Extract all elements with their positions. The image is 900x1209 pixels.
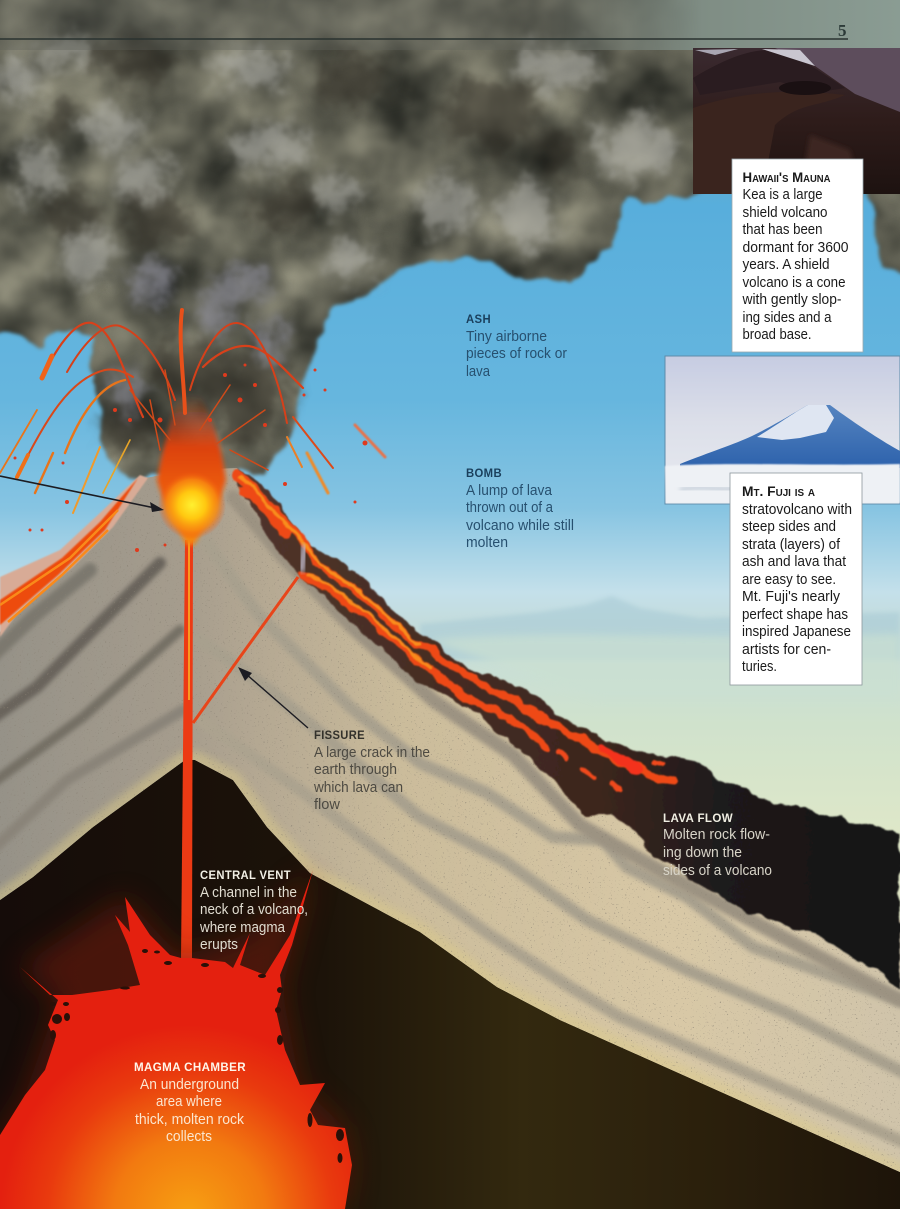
label: magma chamber — [134, 1060, 246, 1145]
caption box: Mt. Fuji: perfect shape has — [742, 607, 848, 623]
label: fissure: flow — [314, 797, 341, 813]
caption box: Mauna Kea: Kea is a large — [742, 187, 822, 203]
caption box: Mauna Kea: years. A shield — [742, 257, 830, 273]
leader arrow: fissure — [238, 667, 308, 728]
caption box: Mt. Fuji: turies. — [742, 659, 777, 675]
label: fissure: earth through — [314, 762, 397, 778]
caption box: Mt. Fuji: inspired Japanese — [742, 624, 851, 640]
label: lava flow: Molten rock flow- — [663, 827, 770, 843]
label: central vent: where magma — [199, 920, 286, 936]
caption box: Mt. Fuji: strata (layers) of — [742, 537, 841, 553]
label: bomb — [466, 466, 574, 551]
volcano cone body — [0, 468, 900, 1180]
caption box: Mt. Fuji: Mt. Fuji's nearly — [742, 589, 841, 605]
lava spatter dots — [14, 364, 368, 552]
label: magma chamber: An underground — [140, 1077, 239, 1093]
label: ash: ASH — [466, 312, 491, 326]
caption box: Mauna Kea: volcano is a cone — [742, 275, 846, 291]
page number: 5 — [838, 21, 846, 40]
caption box: Mauna Kea: that has been — [742, 222, 822, 238]
label: lava flow: sides of a volcano — [663, 863, 772, 879]
label: central vent: CENTRAL VENT — [200, 868, 291, 882]
label: lava flow: ing down the — [663, 845, 742, 861]
label: fissure: A large crack in the — [314, 745, 430, 761]
label: central vent: neck of a volcano, — [200, 902, 308, 918]
label: magma chamber: MAGMA CHAMBER — [134, 1060, 246, 1074]
caption box: Mt. Fuji: are easy to see. — [742, 572, 836, 588]
caption box: Mt. Fuji: artists for cen- — [742, 642, 831, 658]
caption box: Mauna Kea — [732, 159, 863, 352]
caption box: Mauna Kea: with gently slop- — [742, 292, 842, 308]
caption box: Mauna Kea: ing sides and a — [742, 310, 832, 326]
distant landscape: mountain and haze — [420, 596, 900, 700]
label: ash: pieces of rock or — [466, 346, 567, 362]
label: fissure: which lava can — [313, 780, 403, 796]
lava fountain arcs — [0, 310, 385, 513]
label: bomb: BOMB — [466, 466, 502, 480]
magma lattice holes — [50, 949, 344, 1163]
photo: Mauna Kea — [693, 48, 900, 194]
photo: Mt. Fuji — [665, 356, 900, 504]
label: bomb: A lump of lava — [466, 483, 553, 499]
magma glow in rock — [0, 870, 352, 1209]
caption box: Mauna Kea: Hawaii's Mauna — [742, 169, 830, 185]
label: fissure: FISSURE — [314, 728, 365, 742]
caption box: Mt. Fuji — [730, 473, 862, 685]
label: bomb: thrown out of a — [466, 500, 554, 516]
label: ash: lava — [466, 364, 491, 380]
label: central vent: erupts — [200, 937, 238, 953]
lava flow black layer — [237, 468, 900, 987]
header rule — [0, 38, 848, 40]
fissure — [193, 577, 298, 723]
caption box: Mauna Kea: shield volcano — [742, 205, 828, 221]
magma chamber — [0, 870, 352, 1209]
central vent — [181, 540, 193, 960]
ash cloud — [0, 0, 900, 478]
label: magma chamber: area where — [156, 1094, 222, 1110]
label: lava flow — [663, 811, 772, 879]
caption box: Mauna Kea: broad base. — [742, 327, 812, 343]
eruption glow — [157, 395, 226, 545]
lava flow strands — [237, 473, 673, 791]
label: central vent — [199, 868, 308, 953]
label: ash — [466, 312, 567, 380]
caption box: Mauna Kea: dormant for 3600 — [742, 240, 848, 256]
label: bomb: molten — [466, 535, 508, 551]
caption box: Mt. Fuji: steep sides and — [742, 519, 836, 535]
label: lava flow: LAVA FLOW — [663, 811, 733, 825]
label: fissure — [313, 728, 430, 813]
caption box: Mt. Fuji: stratovolcano with — [742, 502, 852, 518]
label: bomb: volcano while still — [466, 518, 574, 534]
smoke at fissure top — [301, 545, 305, 572]
label: central vent: A channel in the — [200, 885, 297, 901]
leader arrow: crater — [0, 476, 164, 512]
caption box: Mt. Fuji: ash and lava that — [742, 554, 846, 570]
label: ash: Tiny airborne — [466, 329, 547, 345]
caption box: Mt. Fuji: Mt. Fuji is a — [742, 483, 815, 499]
volcano lower rock core — [0, 760, 900, 1209]
label: magma chamber: collects — [166, 1129, 212, 1145]
label: magma chamber: thick, molten rock — [135, 1112, 245, 1128]
left lava flow — [0, 475, 148, 637]
